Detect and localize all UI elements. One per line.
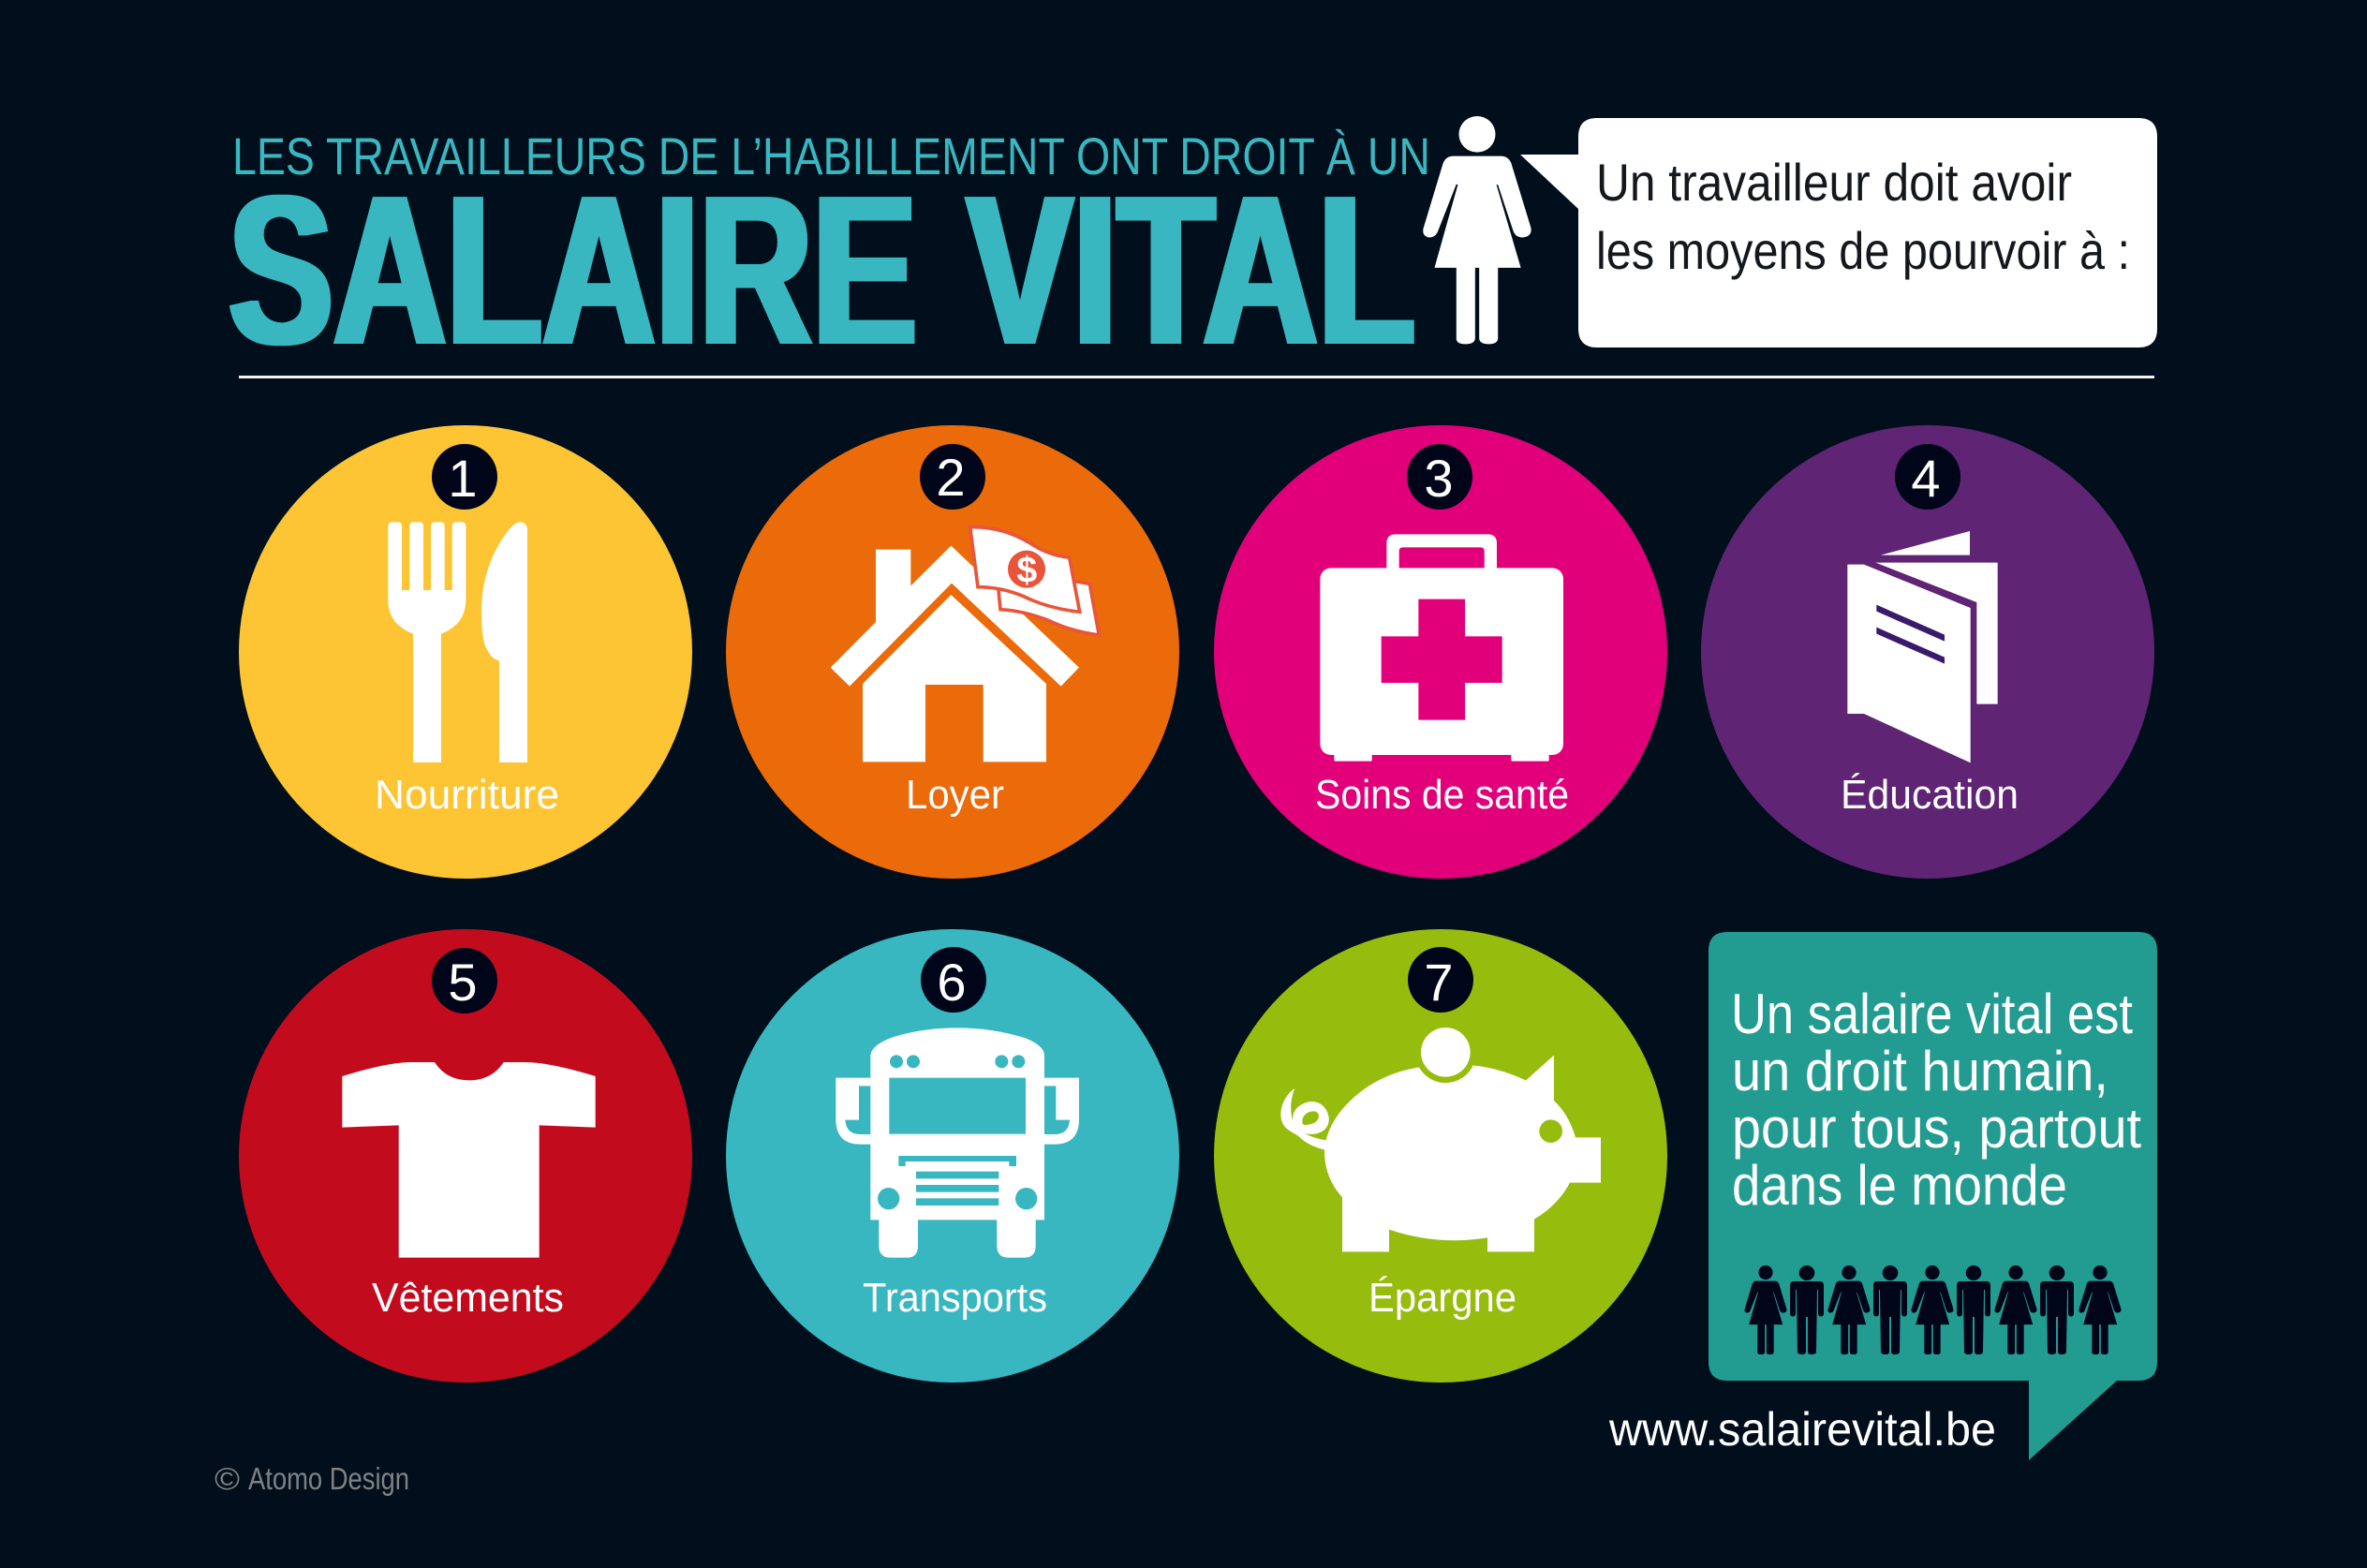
callout text: un droit humain, (1732, 1040, 2108, 1102)
callout text: dans le monde (1732, 1154, 2067, 1217)
label: Éducation (1841, 772, 2019, 818)
icon: t-shirt (342, 1062, 596, 1258)
callout text: Un salaire vital est (1731, 983, 2133, 1045)
icon: house with money: $ (1016, 550, 1037, 591)
callout text: pour tous, partout (1732, 1097, 2141, 1160)
label: Soins de santé (1315, 772, 1569, 818)
panel: Soins de santé (1214, 425, 1667, 879)
number badge 7: 7 (1424, 953, 1454, 1012)
bubble text (1596, 153, 2130, 280)
icon: book (1847, 531, 1998, 762)
speech bubble: worker (1520, 118, 2157, 348)
label: Loyer (906, 772, 1004, 818)
bubble shape (1520, 118, 2157, 348)
number badge 3: 3 (1424, 449, 1454, 508)
copyright credit: Atomo Design (248, 1461, 409, 1496)
panel: Épargne (1214, 929, 1667, 1383)
number badge 1 (432, 444, 497, 510)
icon: woman figure (1423, 116, 1531, 344)
callout: droit humain (1709, 932, 2157, 1460)
title: VITAL: VITAL (967, 152, 1415, 390)
icon: piggy bank (1280, 1028, 1601, 1251)
bubble text: les moyens de pourvoir à : (1596, 221, 2130, 280)
icon: house with money (831, 527, 1099, 762)
icon: fork and knife (388, 522, 527, 762)
number badge 7 (1408, 947, 1473, 1013)
icon: row of people (1744, 1265, 2122, 1354)
label: Transports (863, 1275, 1047, 1321)
icon: bus (836, 1028, 1079, 1258)
copyright credit: © (215, 1461, 240, 1496)
title: overline: LES TRAVAILLEURS DE L’HABILLEMENT ONT DROIT À UN (232, 126, 1430, 185)
number badge 2 (920, 444, 985, 510)
number badge 3 (1407, 444, 1472, 510)
number badge 5: 5 (448, 953, 478, 1012)
title (229, 126, 1430, 390)
bubble text: Un travailleur doit avoir (1596, 153, 2072, 212)
label: Épargne (1368, 1275, 1516, 1321)
number badge 2: 2 (936, 448, 966, 507)
icon: first aid kit (1320, 534, 1563, 762)
label: Vêtements (372, 1275, 564, 1321)
number badge 1: 1 (448, 449, 478, 508)
callout text (1731, 983, 2141, 1217)
number badge 6: 6 (937, 953, 967, 1012)
panel: Éducation (1701, 425, 2154, 879)
panel: Vêtements (239, 929, 692, 1383)
title: SALAIRE: SALAIRE (229, 152, 917, 390)
number badge 6 (921, 947, 986, 1013)
panel: Nourriture (239, 425, 692, 879)
panel: Transports (726, 929, 1179, 1383)
number badge 4 (1895, 444, 1960, 510)
label: Nourriture (375, 772, 559, 818)
panel: Loyer (726, 425, 1179, 879)
number badge 5 (432, 948, 497, 1013)
website url: www.salairevital.be (1608, 1403, 1996, 1456)
callout shape (1709, 932, 2157, 1460)
number badge 4: 4 (1911, 449, 1941, 508)
